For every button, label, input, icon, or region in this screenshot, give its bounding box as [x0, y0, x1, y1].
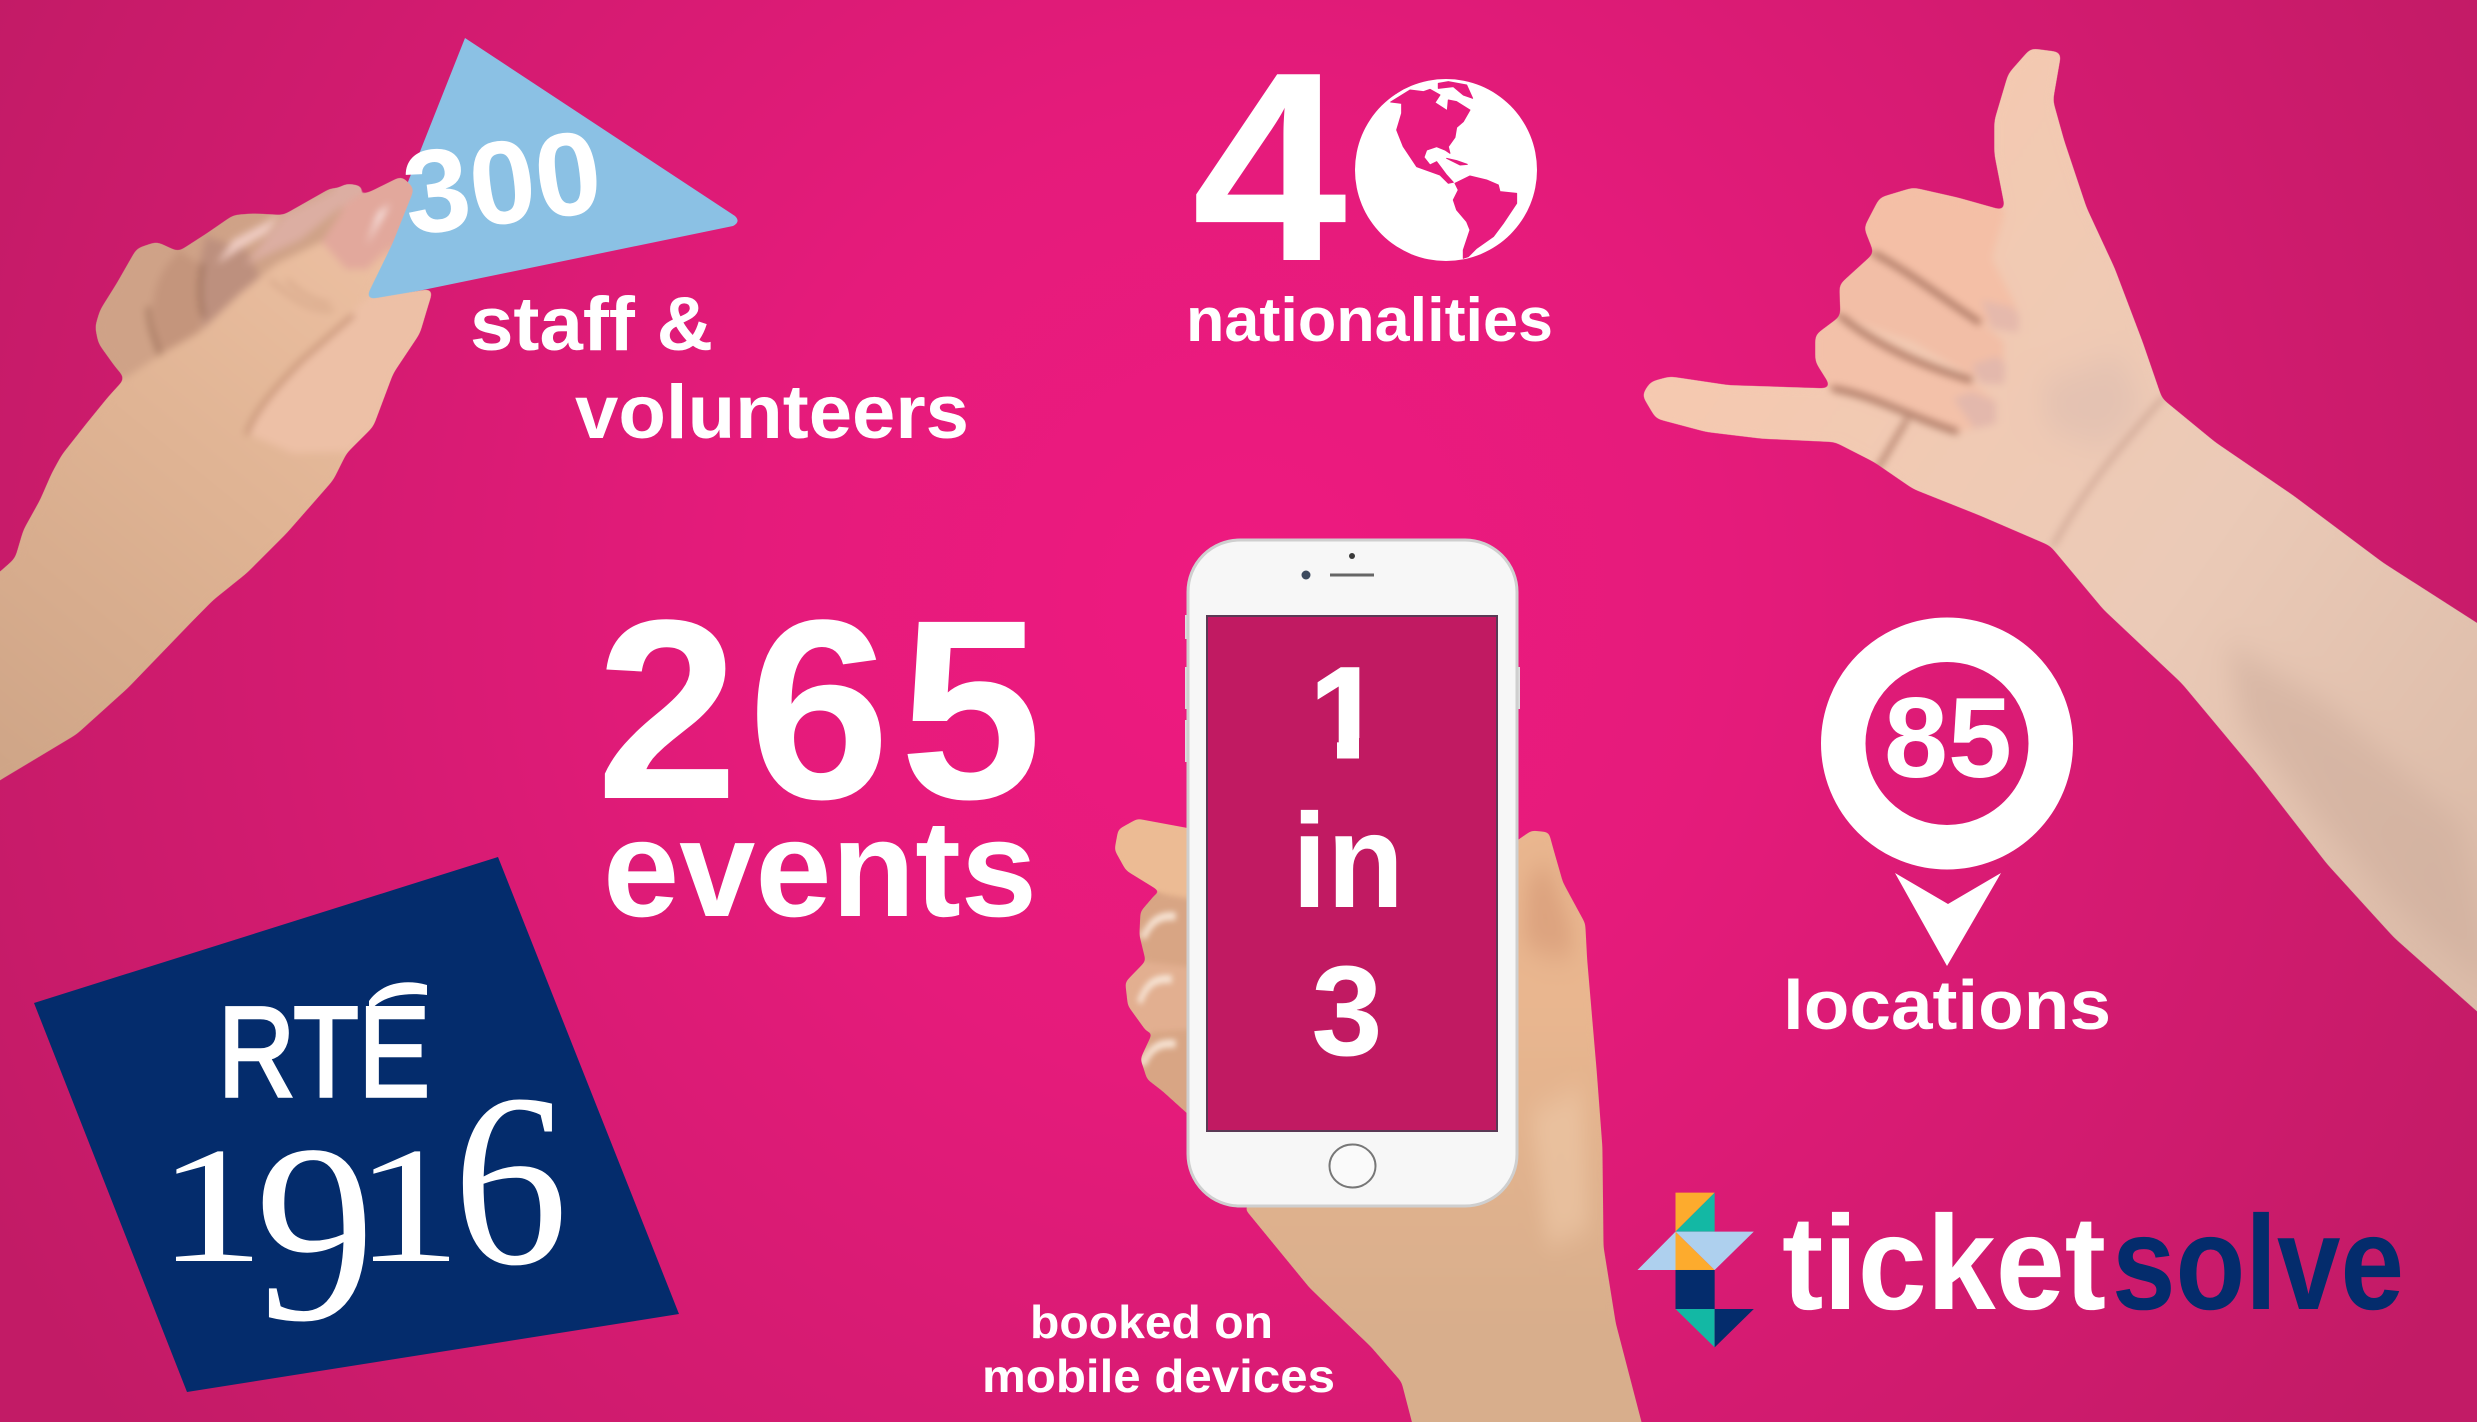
year 1916: 1 — [157, 1113, 265, 1297]
panel: 40 nationalities — [1186, 17, 1553, 355]
icon: right hand and forearm — [1642, 48, 2477, 1052]
wordmark ticket: ticket — [1782, 1189, 2106, 1338]
icon: location pin ring — [1843, 640, 2051, 847]
icon: globe — [1355, 79, 1537, 261]
index finger below thumb — [247, 289, 433, 453]
icon: geometric logo mark — [1637, 1193, 1754, 1347]
word in: in — [1292, 787, 1404, 936]
second nail — [217, 215, 280, 264]
year 1916: 1 — [354, 1113, 462, 1297]
panel: RTE 1916 logo — [34, 857, 679, 1392]
panel: 265 events — [596, 567, 1042, 946]
label: locations: locations — [1783, 966, 2111, 1044]
nails — [1981, 300, 2019, 333]
year 1916: 6 — [453, 1044, 568, 1317]
icon: pin arrow — [1895, 873, 2001, 966]
palm shadow — [2042, 355, 2143, 449]
wordmark RTE: RTE — [218, 981, 430, 1124]
curled fingers — [1864, 188, 2017, 332]
label: booked on: booked on — [1030, 1296, 1273, 1348]
palm and wrist — [0, 176, 433, 793]
panel: 1 in 3 booked on mobile — [982, 540, 1646, 1422]
back fingers — [95, 187, 353, 378]
thumb creases — [270, 280, 333, 310]
number 265: 265 — [596, 567, 1042, 853]
year 1916 — [157, 1044, 568, 1375]
year 1916: 9 — [255, 1093, 375, 1375]
label: volunteers: volunteers — [575, 370, 969, 455]
number 1: 1 — [1310, 642, 1382, 785]
number 300: 300 — [396, 106, 609, 261]
wordmark solve: solve — [2112, 1189, 2404, 1338]
navy panel — [34, 857, 679, 1392]
icon: hand behind phone — [1114, 819, 1646, 1422]
label: staff &: staff & — [470, 282, 713, 367]
panel: 300 staff and volunteers — [0, 38, 969, 793]
icon: left hand holding card — [0, 176, 433, 793]
phone screen — [1207, 616, 1497, 1131]
number 85: 85 — [1884, 675, 2012, 802]
index behind thumb — [245, 183, 367, 265]
number 4: 4 — [1192, 17, 1349, 318]
thumb nail — [322, 176, 414, 269]
accent swoosh — [369, 982, 427, 1012]
number 3: 3 — [1311, 940, 1383, 1083]
label: events: events — [603, 792, 1037, 946]
label: mobile devices: mobile devices — [982, 1350, 1335, 1402]
label: nationalities: nationalities — [1186, 286, 1553, 355]
blue triangle card — [360, 38, 738, 303]
arm shadow — [2226, 643, 2477, 991]
panel: ticketsolve logo — [1637, 1189, 2404, 1347]
phone body — [1185, 540, 1520, 1206]
panel: 85 locations — [1783, 640, 2111, 1044]
